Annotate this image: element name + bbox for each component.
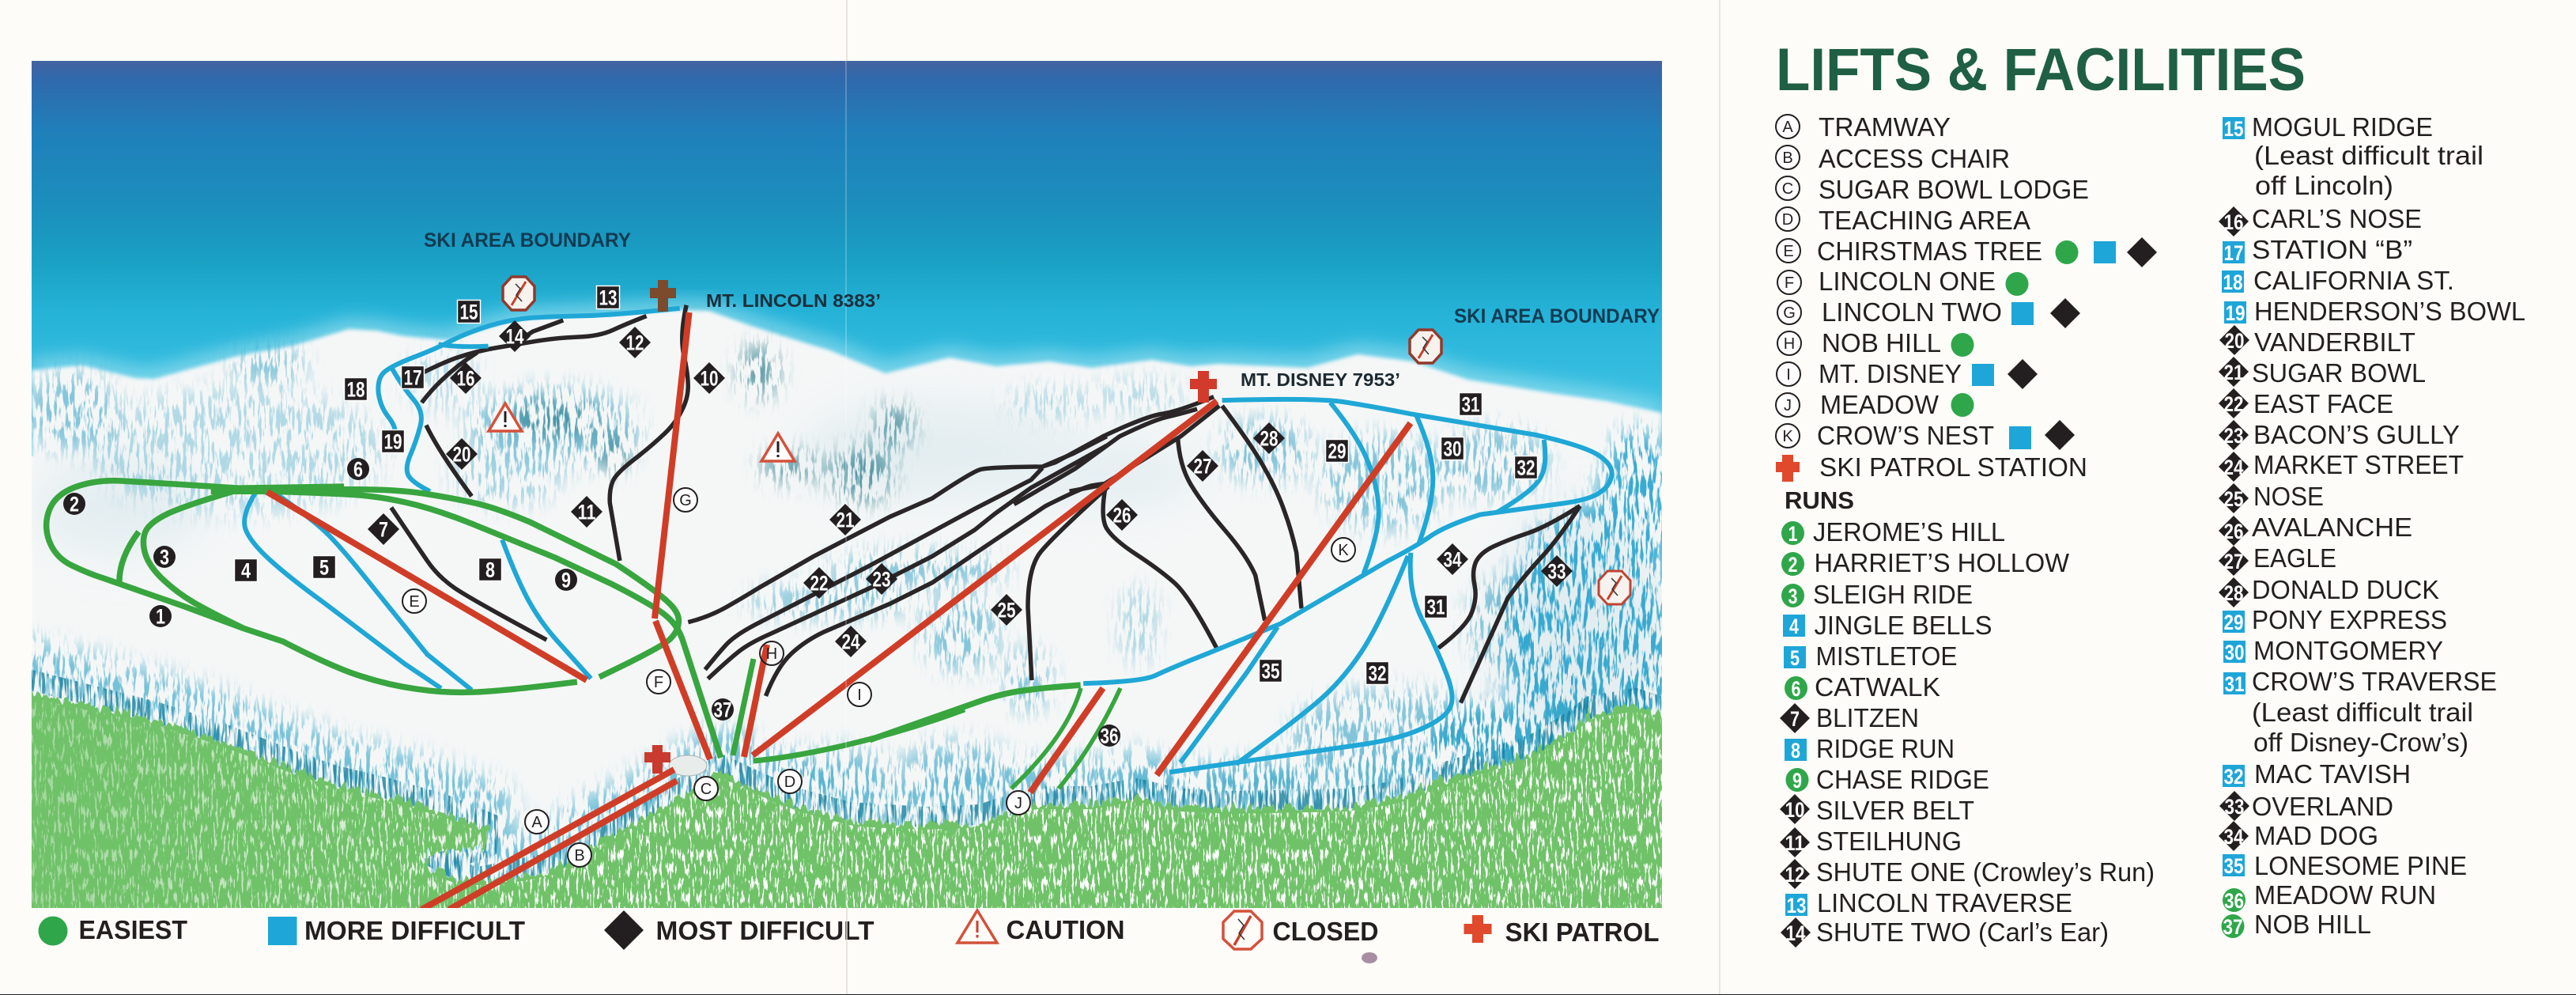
runs in the Mt. Disney area — [870, 397, 1612, 772]
run marker 2 — [63, 492, 85, 516]
run 6: 6 — [1792, 677, 1801, 701]
run 1: JEROME’S HILL — [1813, 517, 2005, 547]
runs in the Mt. Lincoln area — [47, 305, 721, 758]
run 33: OVERLAND — [2252, 792, 2393, 821]
lift marker E — [402, 589, 426, 613]
run marker 37: 37 — [713, 698, 732, 721]
lift: Christmas Tree — [267, 492, 587, 680]
lift marker B — [568, 843, 591, 867]
run 9: 9 — [1792, 769, 1802, 793]
run marker 5 — [313, 555, 335, 579]
run 31 — [2223, 667, 2497, 757]
item: Meadow: MEADOW — [1820, 390, 1940, 419]
run marker 30: 30 — [1444, 437, 1461, 460]
lift: Meadow — [1030, 688, 1103, 793]
run 4: JINGLE BELLS — [1814, 611, 1992, 640]
forest edge shading on snow — [0, 656, 1676, 870]
legend: caution — [958, 910, 1124, 944]
run 30: MONTGOMERY — [2253, 636, 2443, 665]
run marker 32 top: 32 — [1517, 456, 1535, 479]
legend: easiest: EASIEST — [79, 915, 187, 944]
legend: most difficult: MOST DIFFICULT — [656, 916, 874, 945]
title: lifts and facilities: LIFTS & FACILITIES — [1776, 36, 2306, 104]
run 25: 25 — [2223, 487, 2244, 511]
item: Lincoln One: LINCOLN ONE — [1819, 267, 1996, 296]
run 33: 33 — [2225, 795, 2244, 819]
run marker 9 — [555, 568, 577, 592]
run marker 26 — [1106, 499, 1138, 531]
item: Meadow: J — [1784, 397, 1792, 414]
run marker 5: 5 — [319, 555, 329, 579]
green forest foreground — [16, 690, 1676, 925]
lift marker I — [848, 683, 871, 706]
run 31: off Disney-Crow’s) — [2253, 728, 2468, 757]
panel: bottom difficulty legend — [38, 910, 1659, 950]
run 36: 36 — [2224, 889, 2244, 913]
legend: closed: CLOSED — [1273, 917, 1379, 946]
item: Crow's Nest: CROW’S NEST — [1817, 421, 1994, 450]
run marker 12: 12 — [626, 331, 644, 354]
run marker 16: 16 — [457, 367, 474, 391]
run 17: STATION “B” — [2252, 235, 2412, 264]
run marker 31 lower: 31 — [1426, 595, 1445, 619]
run marker 2: 2 — [70, 492, 79, 516]
lift marker D — [778, 770, 802, 793]
run 7: BLITZEN — [1816, 703, 1919, 732]
run marker 8 — [479, 558, 501, 582]
run 22: EAST FACE — [2253, 389, 2393, 418]
stain on paper — [1362, 952, 1377, 963]
run marker 10 — [693, 362, 725, 394]
run marker 36: 36 — [1101, 724, 1118, 748]
run 37: NOB HILL — [2254, 910, 2371, 939]
lift marker K: K — [1338, 542, 1349, 559]
run 30: 30 — [2225, 641, 2244, 664]
item: Chirstmas Tree — [1777, 236, 2157, 267]
legend: easiest — [38, 915, 187, 946]
lift: Nob Hill — [744, 645, 767, 757]
run marker 33 — [1541, 555, 1573, 587]
run number markers on map — [63, 286, 1573, 748]
run marker 6 — [347, 457, 369, 481]
run 20: 20 — [2225, 329, 2244, 353]
run 2: 2 — [1788, 553, 1798, 577]
run 25 — [2219, 482, 2324, 513]
run marker 15: 15 — [460, 301, 478, 324]
lift marker G — [674, 488, 697, 512]
run marker 11 — [571, 496, 602, 528]
item: Chirstmas Tree: CHIRSTMAS TREE — [1817, 236, 2042, 266]
run 1: 1 — [1788, 522, 1798, 546]
legend: closed — [1223, 911, 1379, 949]
run 34: 34 — [2223, 825, 2244, 849]
run 34: MAD DOG — [2254, 821, 2378, 850]
run marker 13: 13 — [599, 286, 617, 310]
run 17: 17 — [2223, 241, 2244, 265]
run marker 12 — [619, 327, 651, 358]
run 27 — [2219, 543, 2336, 576]
run 31: (Least difficult trail — [2252, 698, 2473, 727]
run 14: 14 — [1785, 921, 1806, 945]
run 11: STEILHUNG — [1816, 827, 1962, 856]
run marker 21: 21 — [837, 508, 854, 532]
legend: caution: CAUTION — [1006, 915, 1124, 944]
run marker 1: 1 — [156, 604, 165, 628]
lift marker A — [525, 810, 549, 834]
run marker 28: 28 — [1260, 427, 1278, 451]
run marker 22: 22 — [810, 571, 829, 595]
icon: closed sign right lower — [1599, 571, 1630, 604]
item: Lincoln One: F — [1785, 274, 1794, 292]
run marker 34: 34 — [1444, 547, 1461, 571]
item: Lincoln Two: G — [1783, 305, 1796, 322]
run 28: 28 — [2223, 581, 2244, 605]
panel: lifts list — [1776, 112, 2157, 482]
lift: Crow's Nest — [1157, 423, 1411, 775]
run marker 11: 11 — [577, 500, 596, 524]
run marker 16 — [450, 362, 482, 394]
run 7 — [1780, 703, 1919, 733]
item: Nob Hill: H — [1784, 335, 1795, 353]
run 13: 13 — [1787, 894, 1806, 917]
run marker 20 — [446, 438, 478, 470]
item: Nob Hill — [1777, 328, 1974, 358]
lift marker H — [760, 641, 784, 665]
run 27: 27 — [2223, 550, 2244, 573]
run 31: CROW’S TRAVERSE — [2252, 667, 2497, 696]
item: Crow's Nest: K — [1782, 428, 1793, 445]
item: Mt. Disney — [1777, 359, 2038, 389]
run 15: MOGUL RIDGE — [2252, 112, 2433, 142]
item: Mt. Disney: I — [1786, 366, 1791, 384]
run marker 4 — [234, 558, 258, 582]
run marker 20: 20 — [452, 443, 471, 467]
lift marker A: A — [531, 814, 542, 831]
lift letter markers on map — [402, 488, 1355, 867]
ridge glow — [32, 310, 1662, 413]
item: Sugar Bowl Lodge: SUGAR BOWL LODGE — [1819, 175, 2089, 204]
run marker 24 — [835, 626, 867, 657]
run 15 — [2223, 112, 2483, 200]
lift marker J: J — [1014, 795, 1022, 812]
item: Teaching Area: TEACHING AREA — [1819, 206, 2030, 235]
run marker 27: 27 — [1194, 454, 1211, 478]
white flecks in forest — [32, 700, 1662, 908]
icon: caution sign upper — [489, 403, 522, 431]
run 23: BACON’S GULLY — [2253, 420, 2460, 449]
bottom scan edge — [0, 994, 2576, 995]
run marker 18: 18 — [346, 378, 365, 402]
icon: closed sign top — [503, 277, 534, 310]
meadow run lines — [1011, 688, 1120, 789]
run 26: 26 — [2223, 520, 2244, 543]
run 24: MARKET STREET — [2253, 450, 2464, 479]
run 7: 7 — [1790, 707, 1800, 731]
lift: Tramway — [421, 770, 674, 910]
item: Sugar Bowl Lodge: C — [1782, 180, 1793, 198]
run 21: SUGAR BOWL — [2252, 358, 2426, 388]
lift marker C: C — [701, 781, 712, 798]
run marker 7: 7 — [379, 517, 388, 541]
lift marker J — [1007, 791, 1030, 815]
lodge building sketch — [669, 755, 707, 776]
run 15: 15 — [2223, 117, 2244, 141]
snow covered mountains — [32, 307, 1662, 456]
black runs: Lincoln — [391, 305, 688, 640]
run 5: 5 — [1790, 646, 1800, 670]
run 13: LINCOLN TRAVERSE — [1817, 888, 2072, 917]
run marker 34 — [1437, 543, 1468, 575]
run 14: SHUTE TWO (Carl’s Ear) — [1816, 917, 2109, 947]
run marker 6: 6 — [353, 457, 363, 481]
run 10: SILVER BELT — [1816, 796, 1974, 825]
faint snow tree streaks — [24, 348, 1550, 805]
fold crease in map — [845, 61, 847, 908]
icon: ski patrol cross at Mt. Disney — [1190, 371, 1217, 403]
run marker 8: 8 — [485, 558, 495, 582]
run 12: 12 — [1785, 863, 1804, 887]
run marker 1 — [149, 604, 172, 628]
green runs: Lincoln — [47, 481, 721, 758]
lift marker G: G — [679, 492, 692, 509]
run 32: MAC TAVISH — [2254, 759, 2411, 789]
icon: ski patrol cross at base — [644, 745, 670, 774]
soft snow shading — [32, 403, 1668, 759]
run 28: DONALD DUCK — [2252, 575, 2439, 604]
run 12: SHUTE ONE (Crowley’s Run) — [1816, 857, 2155, 887]
page fold at right panel — [1719, 0, 1720, 995]
panel: runs list column one — [1780, 517, 2155, 948]
lift marker C — [694, 777, 718, 800]
grey-teal rock patches — [506, 345, 912, 502]
legend: ski patrol: SKI PATROL — [1505, 917, 1659, 947]
run marker 24: 24 — [841, 630, 860, 653]
run marker 23: 23 — [873, 568, 890, 592]
dense trees on east slope — [1431, 427, 1676, 783]
run marker 35: 35 — [1262, 660, 1279, 683]
run 15: (Least difficult trail — [2254, 141, 2483, 170]
lift: Access Chair — [449, 781, 677, 910]
run 3: 3 — [1788, 585, 1798, 608]
run marker 14 — [499, 320, 531, 352]
run marker 3: 3 — [160, 546, 169, 569]
run marker 25 — [991, 594, 1022, 626]
run 31: 31 — [2225, 672, 2244, 696]
lift marker F: F — [654, 674, 663, 691]
run 5: MISTLETOE — [1815, 641, 1958, 671]
green run: Meadow connector — [870, 685, 1081, 740]
blue runs: Disney — [1083, 399, 1612, 772]
run marker 25: 25 — [998, 598, 1015, 622]
item: Lincoln Two — [1777, 297, 2080, 328]
lift marker I: I — [857, 687, 862, 704]
run marker 22 — [803, 567, 835, 599]
lift: Mt. Disney — [753, 401, 1217, 755]
run 9: CHASE RIDGE — [1816, 765, 1989, 794]
run 26: AVALANCHE — [2252, 513, 2412, 542]
item: Access Chair: B — [1782, 149, 1793, 167]
sky background — [32, 61, 1662, 456]
map label: ski area boundary right: SKI AREA BOUNDARY — [1454, 305, 1660, 327]
run 23: 23 — [2223, 424, 2244, 448]
run 19: HENDERSON’S BOWL — [2254, 297, 2525, 326]
item: Teaching Area: D — [1782, 211, 1793, 229]
run 29: PONY EXPRESS — [2252, 605, 2447, 634]
run 27: EAGLE — [2253, 543, 2336, 573]
run 2: HARRIET’S HOLLOW — [1814, 548, 2070, 577]
run 8: RIDGE RUN — [1816, 734, 1955, 763]
lift: Lincoln One — [655, 621, 710, 759]
item: Nob Hill: NOB HILL — [1822, 328, 1941, 358]
run 24: 24 — [2223, 456, 2244, 479]
run 18: CALIFORNIA ST. — [2253, 266, 2454, 295]
item: Lincoln Two: LINCOLN TWO — [1822, 297, 2002, 327]
run marker 9: 9 — [561, 568, 571, 592]
dark trees at forest edge — [0, 672, 1676, 878]
blue runs: Lincoln — [244, 308, 680, 690]
legend: most difficult — [604, 910, 874, 950]
heading: runs: RUNS — [1785, 486, 1854, 514]
run marker 3 — [153, 546, 176, 569]
green run: Nob Hill — [733, 659, 754, 755]
lift: Lincoln Two — [655, 312, 689, 619]
run 36: MEADOW RUN — [2254, 880, 2436, 910]
run 25: NOSE — [2253, 482, 2324, 511]
run 10: 10 — [1785, 798, 1804, 822]
lift marker B: B — [574, 847, 585, 864]
item: Access Chair: ACCESS CHAIR — [1819, 144, 2010, 173]
run 37: 37 — [2223, 915, 2242, 939]
panel: trail map illustration — [0, 61, 1676, 925]
run marker 27 — [1187, 450, 1218, 482]
run 22: 22 — [2223, 392, 2244, 416]
black runs: East Face group — [688, 437, 1107, 696]
item: Mt. Disney: MT. DISNEY — [1819, 359, 1962, 388]
run 16: 16 — [2223, 210, 2244, 234]
run 29: 29 — [2223, 611, 2244, 634]
item: Tramway: TRAMWAY — [1819, 112, 1951, 142]
run 11: 11 — [1785, 831, 1804, 855]
run marker 32 lower: 32 — [1368, 661, 1387, 685]
run 8: 8 — [1791, 739, 1800, 762]
run 20: VANDERBILT — [2254, 327, 2415, 357]
lift marker E: E — [409, 593, 420, 611]
run 32: 32 — [2223, 765, 2244, 789]
run marker 21 — [829, 504, 861, 535]
icon: closed sign right top — [1410, 330, 1441, 363]
run 15: off Lincoln) — [2255, 171, 2393, 200]
item: Crow's Nest — [1776, 420, 2075, 450]
page fold at centre — [846, 0, 848, 995]
run 35: 35 — [2223, 854, 2244, 878]
map label: Mt. Disney: MT. DISNEY 7953’ — [1241, 369, 1400, 390]
run marker 29: 29 — [1328, 440, 1346, 463]
legend: more difficult: MORE DIFFICULT — [304, 916, 525, 945]
lift marker K — [1331, 538, 1355, 562]
run marker 10: 10 — [701, 367, 718, 391]
panel: runs list column two — [2219, 112, 2525, 939]
run marker 7 — [368, 513, 399, 545]
run marker 19: 19 — [384, 430, 402, 454]
icon: caution sign lower — [761, 433, 795, 461]
item: Chirstmas Tree: E — [1783, 243, 1794, 260]
icon: ski patrol cross at Mt. Lincoln — [650, 280, 676, 312]
map label: ski area boundary left: SKI AREA BOUNDARY — [424, 229, 631, 252]
item: Tramway: A — [1782, 119, 1793, 136]
lift marker D: D — [784, 774, 795, 791]
run 19: 19 — [2225, 301, 2246, 325]
run 3: SLEIGH RIDE — [1813, 580, 1973, 609]
item: Meadow — [1776, 390, 1974, 419]
run marker 26: 26 — [1113, 503, 1131, 527]
lift marker F — [647, 670, 670, 694]
black runs: Disney — [1014, 397, 1580, 703]
run marker 23 — [866, 563, 897, 595]
green run: Teaching area — [754, 709, 965, 761]
item: Ski Patrol Station: SKI PATROL STATION — [1819, 452, 2087, 482]
run marker 4: 4 — [241, 558, 251, 582]
lift marker H: H — [766, 645, 777, 663]
run marker 28 — [1253, 422, 1285, 454]
run marker 31 top: 31 — [1461, 392, 1480, 416]
run 16: CARL’S NOSE — [2252, 204, 2422, 233]
run 6: CATWALK — [1815, 672, 1940, 702]
run marker 14: 14 — [506, 324, 523, 348]
map label: Mt. Lincoln: MT. LINCOLN 8383’ — [706, 290, 881, 311]
run 21: 21 — [2223, 361, 2244, 384]
run 35: LONESOME PINE — [2254, 851, 2467, 880]
run marker 33: 33 — [1548, 560, 1566, 584]
run 4: 4 — [1789, 615, 1799, 638]
run marker 17: 17 — [403, 365, 422, 389]
run 18: 18 — [2223, 271, 2242, 294]
